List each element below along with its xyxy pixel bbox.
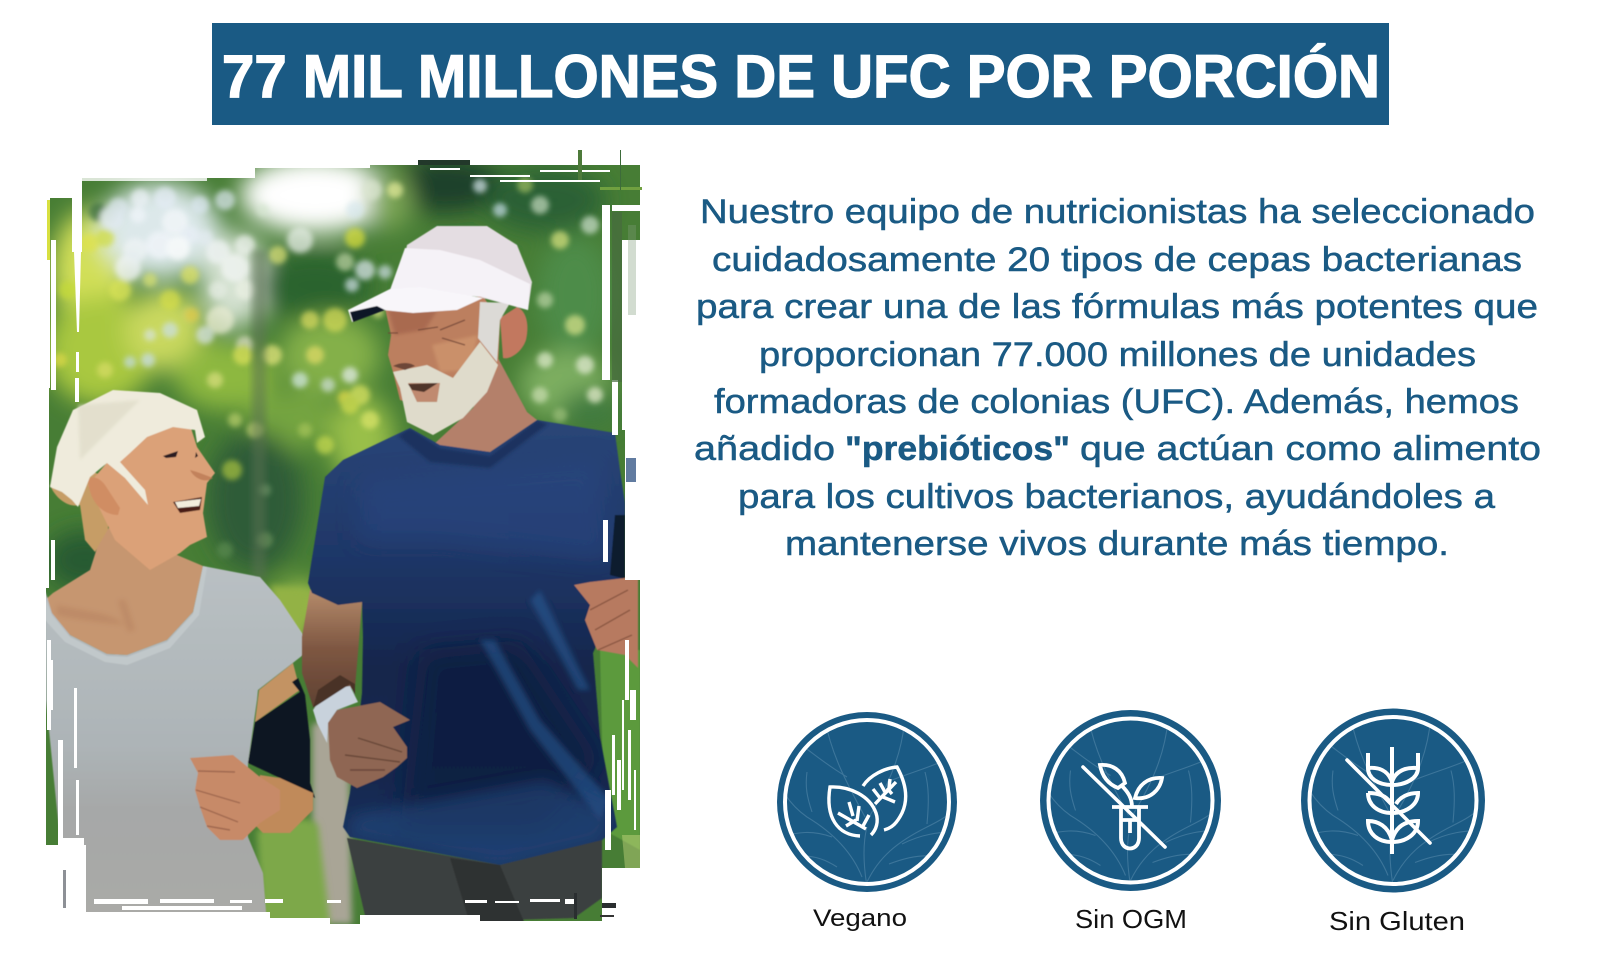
man: visor brim [348,287,483,322]
brush marks at edges [47,150,642,919]
man: wristband [313,686,358,743]
woman: hair [50,390,205,507]
man: face [385,296,500,402]
label: vegano: Vegano [813,905,907,932]
icon: wheat ear, crossed out [1347,747,1430,854]
body paragraph: añadido [694,430,835,468]
woman: grey tee [45,566,312,924]
man: white beard [393,342,498,435]
woman: ear [88,478,120,515]
man: dark cuff hair [313,675,355,708]
body paragraph: Nuestro equipo de nutricionistas ha seleccionado [700,193,1535,231]
man: side hair [478,302,510,362]
body paragraph: formadoras de colonias (UFC). Además, hemos [714,383,1519,421]
photo background: blurred trees [45,157,640,924]
body paragraph: cuidadosamente 20 tipos de cepas bacterianas [712,241,1522,279]
label: sin gluten: Sin Gluten [1329,906,1465,936]
badge: sin gluten [1301,708,1485,936]
woman: black armband [248,678,315,798]
body paragraph: para crear una de las fórmulas más potentes que [696,288,1538,326]
path and grass [257,585,640,924]
tree trunk [252,250,266,580]
woman: forearm [250,775,313,833]
man: neck [433,358,537,452]
body paragraph [694,193,1541,563]
man: white hair [405,226,532,310]
woman: chest shadow [58,603,132,628]
body paragraph: mantenerse vivos durante más tiempo. [785,525,1449,563]
torn white edge [40,150,640,927]
woman: back hair [50,472,109,552]
woman: tee neckline [45,566,207,665]
badge: sin OGM [1040,710,1221,934]
title banner [212,23,1389,125]
man: under brim [350,306,385,322]
badge: vegano [777,712,957,932]
woman: neck and chest [46,528,204,656]
woman: face [88,425,215,570]
woman: fist [190,755,280,840]
icon: two leaves [829,767,906,836]
body paragraph: proporcionan 77.000 millones de unidades [759,336,1476,374]
title text: 77 MIL MILLONES DE UFC POR PORCIÓN [222,43,1380,110]
man: mouth [408,383,440,402]
woman: nose shadow [190,470,213,480]
woman: upper arm [255,663,300,722]
body paragraph: "prebióticos" [845,430,1070,468]
man: left hand [328,702,410,788]
man: shorts [347,838,602,924]
woman: eye [163,451,198,458]
photo: senior couple jogging in a park [45,157,640,924]
man [300,226,640,924]
icon: plant in test tube, crossed out [1083,765,1165,848]
man: eye creases [388,320,465,345]
man: navy tee [300,420,640,870]
label: sin OGM: Sin OGM [1075,904,1187,934]
man: white visor [390,248,530,310]
body paragraph: que actúan como alimento [1080,430,1541,468]
man: forearm [302,590,362,707]
man: right hand [574,578,638,668]
woman [45,390,315,924]
body paragraph: para los cultivos bacterianos, ayudándoles a [738,478,1495,516]
woman: mouth [173,497,202,513]
man: ear [500,307,527,358]
